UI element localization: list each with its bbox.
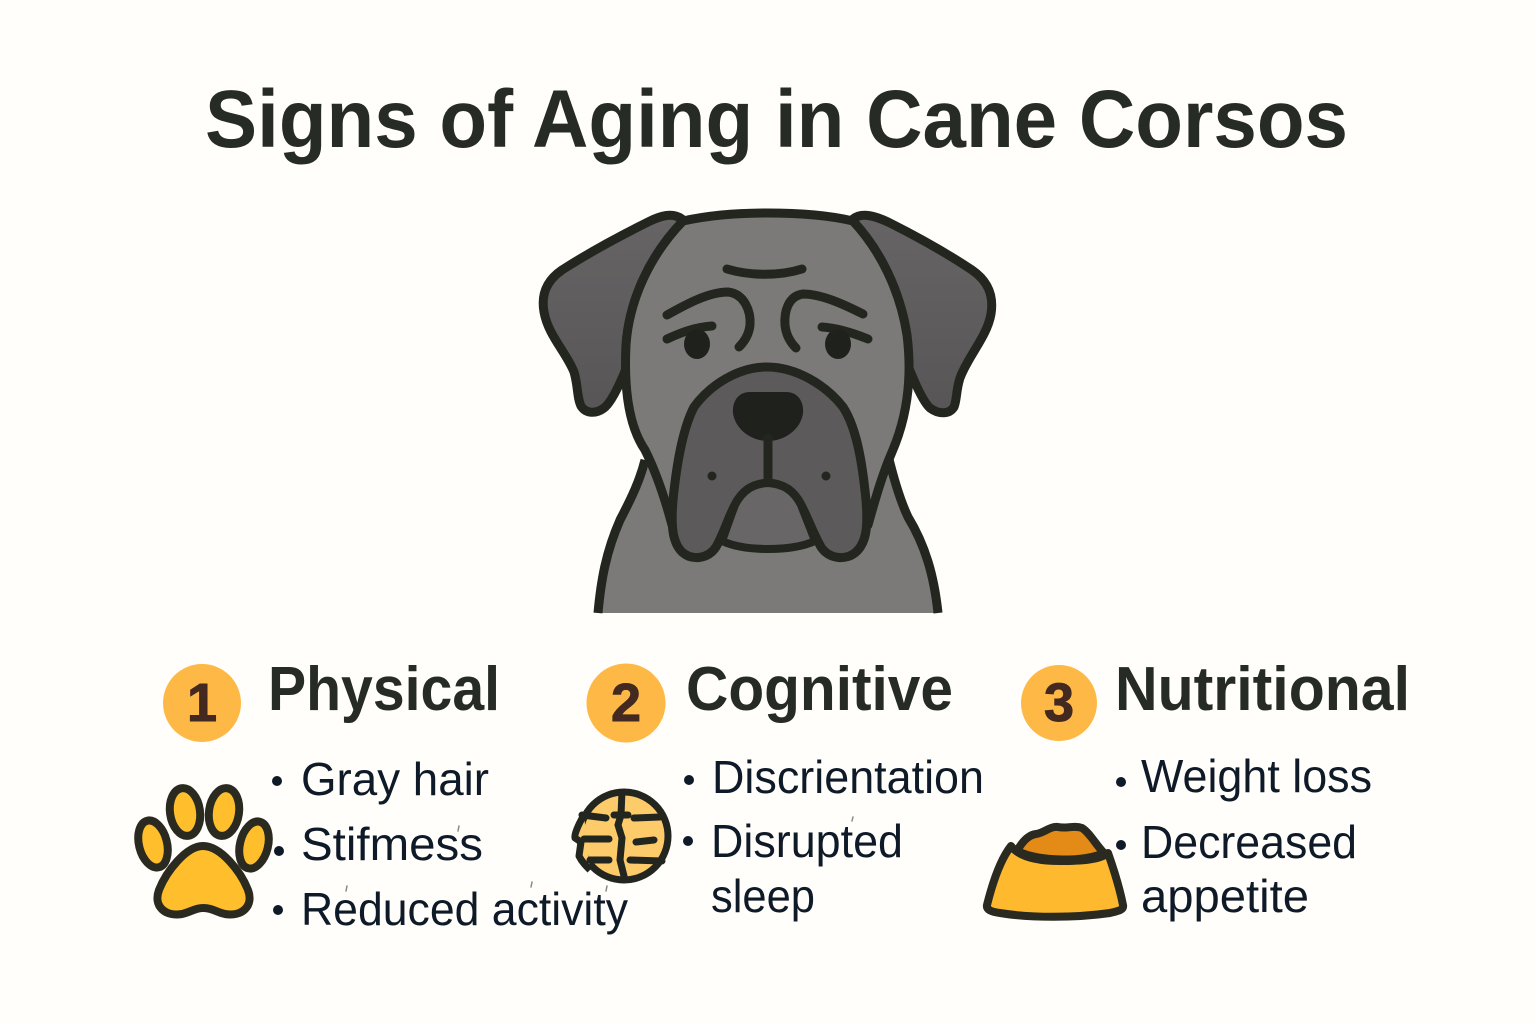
heading: nutritional: Nutritional xyxy=(1115,655,1410,724)
title: Signs of Aging in Cane Corsos xyxy=(205,74,1348,165)
list: physical signs: Stifmess xyxy=(301,818,483,870)
list: cognitive signs: Disrupted xyxy=(711,815,903,867)
number badge 2: 2 xyxy=(611,673,641,733)
list: cognitive signs xyxy=(683,751,984,922)
chin and mouth xyxy=(722,483,815,549)
muzzle and jowls xyxy=(672,367,867,558)
number badge 3 xyxy=(1021,665,1097,741)
list: nutritional signs xyxy=(1116,750,1372,922)
number badge 1 xyxy=(163,664,241,742)
right eye xyxy=(822,327,868,359)
list: physical signs xyxy=(272,753,628,935)
list: physical signs: Reduced activity xyxy=(301,883,628,935)
list: cognitive signs: sleep xyxy=(711,870,815,922)
forehead wrinkle xyxy=(727,269,802,274)
list: nutritional signs: Weight loss xyxy=(1141,750,1372,802)
illustration: aging Cane Corso dog head xyxy=(543,213,992,613)
number badge 3: 3 xyxy=(1044,673,1074,733)
column: physical xyxy=(134,655,628,935)
nose xyxy=(733,392,803,441)
whisker spots xyxy=(708,472,830,480)
icon: food bowl xyxy=(987,827,1123,917)
list: nutritional signs: appetite xyxy=(1141,870,1309,922)
left eye xyxy=(667,326,712,359)
left ear xyxy=(543,215,682,412)
dog head xyxy=(626,213,909,525)
dog body and neck xyxy=(598,455,938,613)
icon: brain xyxy=(575,791,668,880)
right brow xyxy=(785,294,863,348)
list: physical signs: Gray hair xyxy=(301,753,489,805)
number badge 2 xyxy=(586,664,666,742)
list: cognitive signs: Discrientation xyxy=(712,751,984,803)
column: nutritional xyxy=(987,655,1410,922)
list: nutritional signs: Decreased xyxy=(1141,816,1357,868)
right ear xyxy=(853,215,992,413)
heading: cognitive: Cognitive xyxy=(686,655,953,724)
number badge 1: 1 xyxy=(187,673,217,733)
philtrum xyxy=(764,438,772,482)
heading: physical: Physical xyxy=(268,655,500,724)
column: cognitive xyxy=(575,655,984,922)
left brow xyxy=(667,292,750,347)
icon: paw print xyxy=(134,786,273,914)
